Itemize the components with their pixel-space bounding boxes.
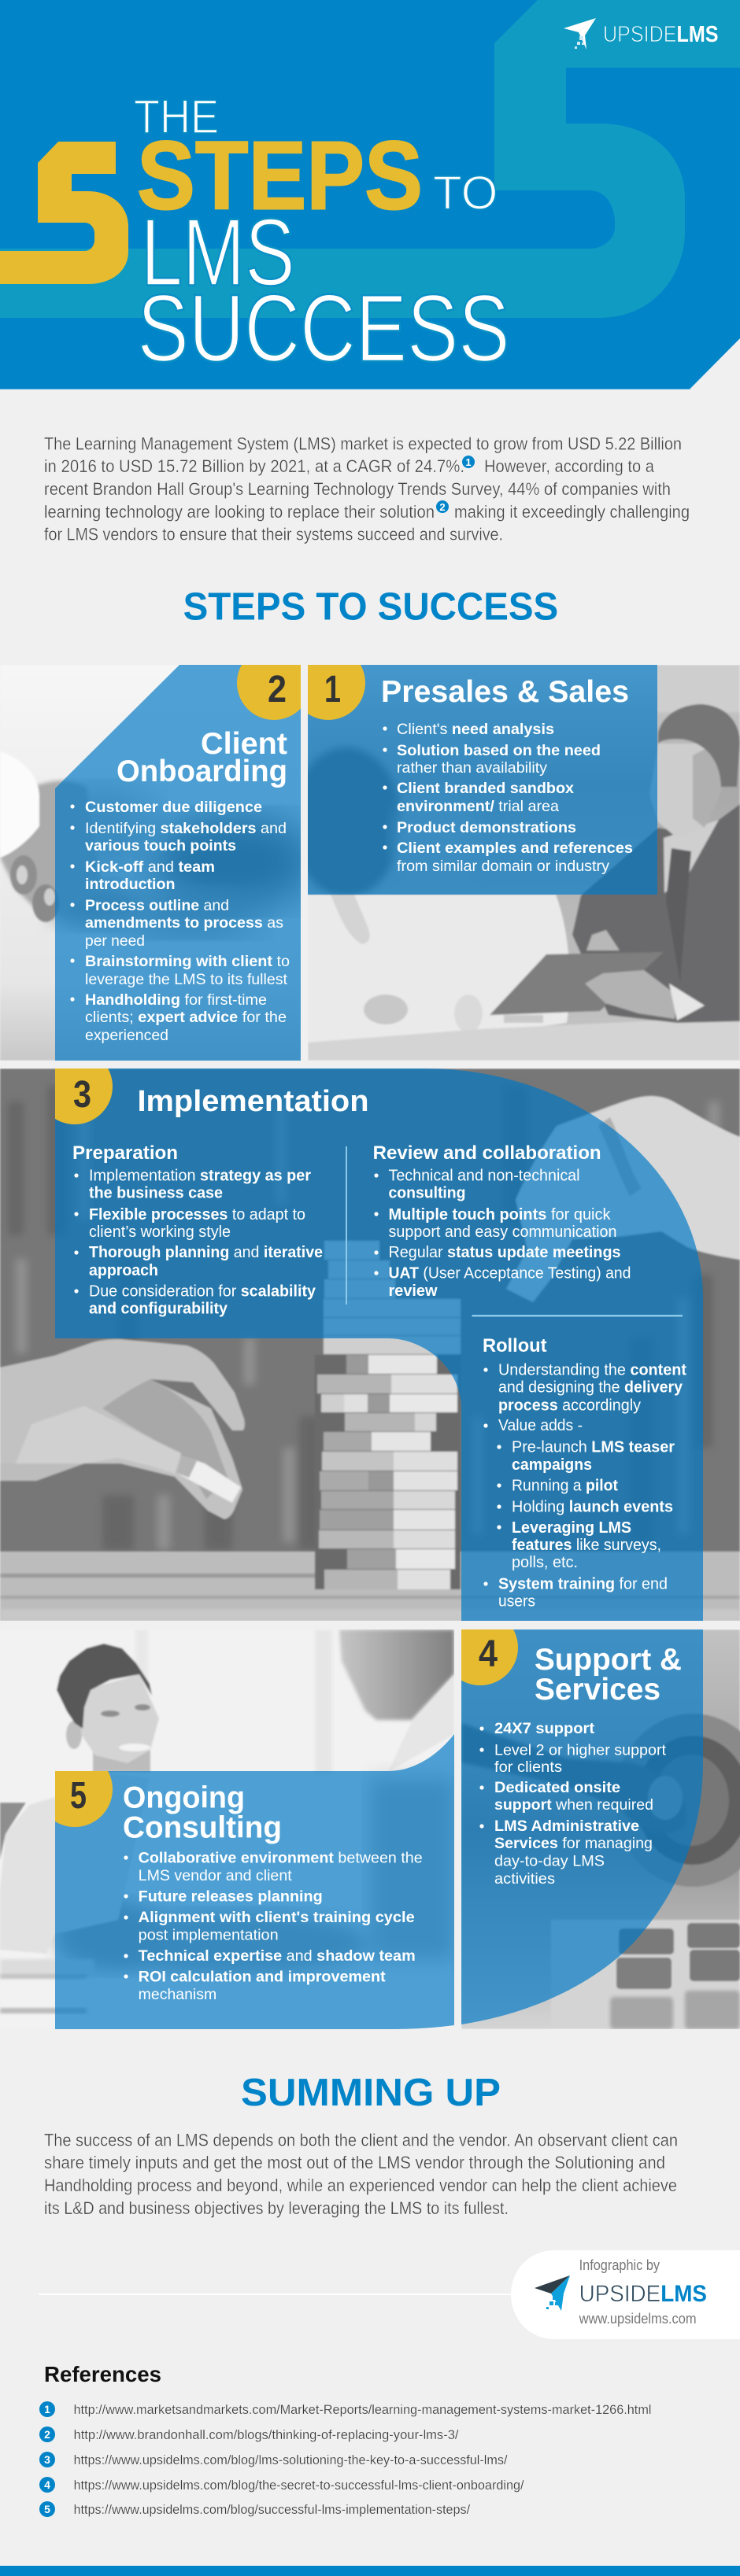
badge: step 3: 3 xyxy=(73,1074,91,1116)
block: preparation: Preparation xyxy=(72,1142,178,1164)
heading: ongoing consulting: Consulting xyxy=(123,1811,282,1844)
panel: ongoing consulting xyxy=(37,1734,454,2029)
big yellow five xyxy=(0,142,128,284)
list: client onboarding items: Customer due diligence xyxy=(85,799,262,816)
block: rollout: Value adds - xyxy=(498,1417,583,1434)
heading: client onboarding: Client xyxy=(201,727,287,761)
list: presales items: Client's need analysis xyxy=(397,721,554,738)
block: review and collaboration xyxy=(373,1142,631,1300)
list: support items: day-to-day LMS xyxy=(494,1854,605,1870)
badge: step 5 xyxy=(55,1771,113,1827)
heading: summing up: SUMMING UP xyxy=(241,2072,501,2114)
title: TO xyxy=(433,167,498,220)
blue-covered darker areas xyxy=(370,1778,454,1959)
block: rollout: features like surveys, xyxy=(512,1537,661,1554)
footer bar xyxy=(0,2566,740,2576)
badge: step 1: 1 xyxy=(324,669,341,710)
block: rollout: polls, etc. xyxy=(512,1554,578,1571)
list: support items: for clients xyxy=(494,1759,562,1776)
heading: implementation: Implementation xyxy=(137,1085,368,1118)
references heading: References xyxy=(44,2362,161,2386)
list: client onboarding items: Process outline and xyxy=(85,897,229,914)
references list: https://www.upsidelms.com/blog/the-secret-to-successful-lms-client-onboarding/ xyxy=(74,2478,524,2493)
list: client onboarding items: leverage the LMS to its fullest xyxy=(85,971,288,988)
list: client onboarding items: experienced xyxy=(85,1027,168,1044)
block: rollout: Running a pilot xyxy=(512,1478,618,1495)
references list: https://www.upsidelms.com/blog/successful-lms-implementation-steps/ xyxy=(74,2502,470,2517)
list: support items: LMS Administrative xyxy=(494,1818,639,1835)
heading: ongoing consulting: Ongoing xyxy=(123,1781,245,1815)
heading: steps to success: STEPS TO SUCCESS xyxy=(183,586,558,629)
big teal five xyxy=(0,0,740,318)
list: client onboarding items xyxy=(70,799,290,1044)
hero banner xyxy=(0,0,740,389)
title: STEPS xyxy=(137,123,423,231)
list: client onboarding items: various touch points xyxy=(85,837,236,854)
badge: step 4 xyxy=(461,1629,518,1685)
table xyxy=(0,1552,740,1621)
summary paragraph: Handholding process and beyond, while an experienced vendor can help the client achieve xyxy=(44,2176,677,2195)
heading: support and services xyxy=(535,1643,682,1707)
panel: implementation xyxy=(37,1049,703,1621)
list: client onboarding items: amendments to process as xyxy=(85,914,283,932)
intro paragraph: 2 xyxy=(439,501,446,513)
badge: step 3 xyxy=(55,1068,113,1124)
title xyxy=(134,90,510,382)
panel: presales and sales xyxy=(308,665,657,895)
panel: client onboarding xyxy=(55,646,311,1061)
block: review and collaboration: Regular status update meetings xyxy=(389,1244,620,1261)
logo: UpsideLMS white: UPSIDELMS xyxy=(603,22,718,47)
block: rollout: Rollout xyxy=(483,1335,547,1356)
summary paragraph: The success of an LMS depends on both the client and the vendor. An observant client can xyxy=(44,2130,678,2150)
block: rollout: process accordingly xyxy=(498,1397,641,1415)
list: presales items: Product demonstrations xyxy=(397,819,576,836)
references list: 3 xyxy=(44,2453,50,2466)
intro paragraph: making it exceedingly challenging xyxy=(454,502,690,522)
block: rollout xyxy=(483,1335,686,1610)
list: presales items: rather than availability xyxy=(397,759,547,777)
block: review and collaboration: Technical and non-technical xyxy=(389,1168,579,1185)
list: client onboarding items: introduction xyxy=(85,876,175,893)
block: review and collaboration: review xyxy=(389,1282,438,1300)
list: consulting items: mechanism xyxy=(139,1987,216,2003)
badge: step 5: 5 xyxy=(70,1775,87,1817)
intro paragraph: for LMS vendors to ensure that their systems succeed and survive. xyxy=(44,525,503,544)
list: consulting items xyxy=(124,1851,423,2003)
block: rollout: Leveraging LMS xyxy=(512,1519,631,1537)
jenga blocks xyxy=(315,1355,461,1589)
references list: http://www.brandonhall.com/blogs/thinking-of-replacing-your-lms-3/ xyxy=(74,2427,459,2442)
list: consulting items: post implementation xyxy=(139,1928,279,1944)
list: support items: Level 2 or higher support xyxy=(494,1742,667,1759)
face and hair xyxy=(650,743,705,836)
callout: infographic by UpsideLMS: Infographic by xyxy=(579,2257,660,2273)
block: preparation: Flexible processes to adapt to xyxy=(89,1206,305,1223)
references list: 5 xyxy=(44,2503,50,2515)
block: rollout: users xyxy=(498,1592,535,1610)
block: preparation: Thorough planning and iterative xyxy=(89,1244,323,1261)
list: consulting items: Alignment with client's training cycle xyxy=(139,1910,415,1926)
head xyxy=(93,1751,150,1772)
list: consulting items: Technical expertise and shadow team xyxy=(139,1948,416,1965)
block: preparation: Implementation strategy as per xyxy=(89,1168,311,1185)
references list: http://www.marketsandmarkets.com/Market-Reports/learning-management-systems-market-1266.html xyxy=(74,2402,652,2417)
block: review and collaboration: Multiple touch points for quick xyxy=(389,1206,611,1223)
heading: client onboarding: Onboarding xyxy=(117,755,287,788)
photo: camera and keyboard xyxy=(461,1629,740,2029)
block: review and collaboration: Review and collaboration xyxy=(373,1142,601,1164)
logo: UpsideLMS white xyxy=(564,18,718,50)
list: client onboarding items: Brainstorming with client to xyxy=(85,953,290,970)
list: presales items: Solution based on the need xyxy=(397,742,601,759)
title: LMS xyxy=(141,199,295,306)
list: client onboarding items: clients; expert advice for the xyxy=(85,1009,287,1026)
list: consulting items: LMS vendor and client xyxy=(139,1868,292,1884)
heading: support and services: Services xyxy=(535,1673,660,1707)
block: rollout: and designing the delivery xyxy=(498,1379,683,1397)
block: preparation: approach xyxy=(89,1262,158,1279)
block: preparation: and configurability xyxy=(89,1300,228,1317)
block: preparation: the business case xyxy=(89,1185,223,1202)
list: consulting items: Collaborative environment between the xyxy=(139,1851,423,1866)
intro paragraph: learning technology are looking to replace their solution xyxy=(44,502,435,522)
references list: 1 xyxy=(44,2403,50,2415)
suit xyxy=(572,804,740,1023)
keyboard keys xyxy=(551,1919,740,2006)
intro paragraph: 1 xyxy=(465,456,472,468)
list: presales items xyxy=(383,721,633,875)
heading: support and services: Support & xyxy=(535,1643,682,1677)
list: support items: Services for managing xyxy=(494,1836,653,1852)
list: client onboarding items: Kick-off and team xyxy=(85,858,215,876)
heading: client onboarding xyxy=(117,727,287,788)
block: preparation: Due consideration for scalability xyxy=(89,1282,316,1300)
title: SUCCESS xyxy=(137,275,510,382)
references list xyxy=(39,2401,652,2517)
clipboard xyxy=(490,952,664,1015)
photo: jenga tower and hands xyxy=(0,1068,740,1621)
badge: step 4: 4 xyxy=(479,1633,498,1675)
references list: 2 xyxy=(44,2428,50,2441)
table xyxy=(308,1017,740,1061)
photo: consultant with clipboard xyxy=(291,665,740,1061)
list: consulting items: Future releases planning xyxy=(139,1889,323,1906)
panel: support and services xyxy=(461,1629,703,2024)
list: client onboarding items: Handholding for first-time xyxy=(85,991,267,1009)
list: client onboarding items: per need xyxy=(85,932,145,950)
heading: presales and sales: Presales & Sales xyxy=(381,675,629,709)
title: THE xyxy=(134,90,219,143)
block: review and collaboration: support and easy communication xyxy=(389,1223,617,1241)
list: support items: Dedicated onsite xyxy=(494,1780,620,1796)
right hand xyxy=(506,1096,740,1302)
references list: 4 xyxy=(44,2478,50,2491)
list: support items: 24X7 support xyxy=(494,1721,595,1737)
block: rollout: System training for end xyxy=(498,1575,668,1592)
callout: infographic by UpsideLMS: UPSIDELMS xyxy=(579,2281,707,2307)
heading: ongoing consulting xyxy=(123,1781,282,1844)
intro paragraph: in 2016 to USD 15.72 Billion by 2021, at a CAGR of 24.7%. xyxy=(44,456,464,476)
list: presales items: environment/ trial area xyxy=(397,798,559,815)
callout: infographic by UpsideLMS xyxy=(511,2250,740,2339)
list: support items: activities xyxy=(494,1871,555,1888)
block: rollout: campaigns xyxy=(512,1456,592,1474)
photo: smiling man xyxy=(0,1629,454,2029)
intro paragraph: The Learning Management System (LMS) market is expected to grow from USD 5.22 Billion xyxy=(44,434,682,454)
intro paragraph: However, according to a xyxy=(484,456,655,476)
badge: step 2 xyxy=(237,665,301,720)
block: rollout: Pre-launch LMS teaser xyxy=(512,1438,675,1456)
left hand xyxy=(0,1339,245,1519)
references list: https://www.upsidelms.com/blog/lms-solutioning-the-key-to-a-successful-lms/ xyxy=(74,2452,508,2467)
badge: step 2: 2 xyxy=(268,669,287,710)
badge: step 1 xyxy=(308,665,365,720)
list: presales items: from similar domain or industry xyxy=(397,858,609,875)
block: preparation: client’s working style xyxy=(89,1223,231,1241)
list: support items xyxy=(479,1721,667,1888)
clients in white xyxy=(308,895,570,1046)
earpiece under panel xyxy=(461,1723,642,1824)
block: review and collaboration: UAT (User Acceptance Testing) and xyxy=(389,1265,631,1282)
block: rollout: Understanding the content xyxy=(498,1362,686,1379)
list: consulting items: ROI calculation and improvement xyxy=(139,1969,386,1986)
shirt and chair xyxy=(0,1803,26,1860)
second person xyxy=(339,1629,454,1720)
list: support items: support when required xyxy=(494,1797,653,1814)
callout: infographic by UpsideLMS: www.upsidelms.com xyxy=(579,2311,697,2327)
intro paragraph: recent Brandon Hall Group's Learning Technology Trends Survey, 44% of companies with xyxy=(44,479,671,499)
icon: paper plane logo xyxy=(535,2275,570,2311)
summary paragraph: its L&D and business objectives by leveraging the LMS to its fullest. xyxy=(44,2198,509,2218)
list: client onboarding items: Identifying stakeholders and xyxy=(85,820,287,837)
block: preparation xyxy=(72,1142,323,1317)
photo: handshake xyxy=(0,752,301,1061)
block: review and collaboration: consulting xyxy=(389,1185,466,1202)
intro paragraph xyxy=(44,434,690,544)
list: presales items: Client branded sandbox xyxy=(397,780,574,797)
summary paragraph xyxy=(44,2130,678,2218)
summary paragraph: share timely inputs and get the most out of the LMS vendor through the Solutioning and xyxy=(44,2153,665,2172)
block: rollout: Holding launch events xyxy=(512,1499,673,1516)
list: presales items: Client examples and references xyxy=(397,840,633,857)
